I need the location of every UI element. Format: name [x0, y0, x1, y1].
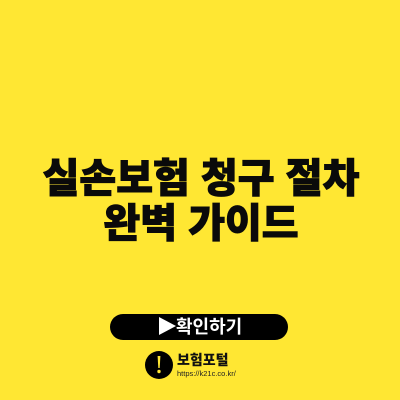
- button: 확인하기: [110, 314, 288, 340]
- title: 완벽 가이드: [103, 191, 299, 249]
- logo: 보험포털: [145, 350, 236, 379]
- logo url: https://k21c.co.kr/: [177, 369, 236, 378]
- title: 실손보험 청구 절차: [43, 146, 359, 204]
- icon: exclamation circle: [145, 351, 173, 379]
- icon: play triangle: [159, 317, 176, 335]
- logo name: 보험포털: [177, 350, 229, 370]
- button label: 확인하기: [176, 313, 242, 339]
- title: [42, 146, 360, 249]
